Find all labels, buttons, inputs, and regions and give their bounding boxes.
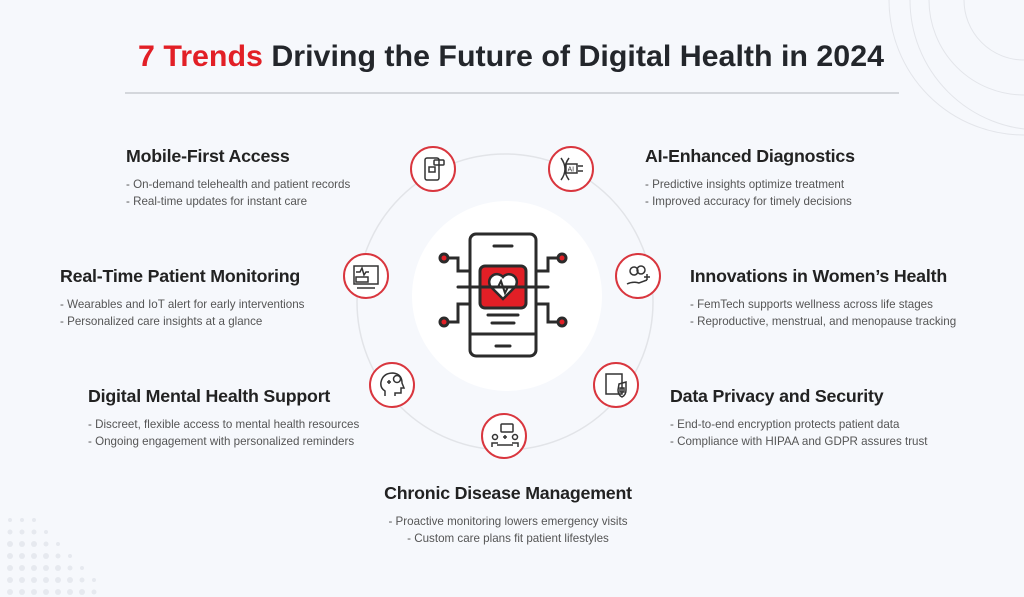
trend: Innovations in Women's Health: - FemTech supports wellness across life stages — [690, 298, 933, 311]
icon: AI DNA: AI — [568, 166, 574, 174]
trend: Chronic Disease Management: - Custom care plans fit patient lifestyles — [407, 532, 609, 545]
trend: AI-Enhanced Diagnostics: - Improved accuracy for timely decisions — [645, 195, 852, 208]
trend: Digital Mental Health Support — [88, 386, 359, 448]
trend: Mobile-First Access: - On-demand telehealth and patient records — [126, 178, 350, 191]
trend: Data Privacy and Security: - End-to-end encryption protects patient data — [670, 418, 899, 431]
trend: Chronic Disease Management: Chronic Disease Management — [384, 483, 632, 503]
trend: Data Privacy and Security: - Compliance with HIPAA and GDPR assures trust — [670, 435, 928, 448]
trend: Real-Time Patient Monitoring — [60, 266, 304, 328]
trend: Real-Time Patient Monitoring: - Wearables and IoT alert for early interventions — [60, 298, 304, 311]
trend: AI-Enhanced Diagnostics: AI-Enhanced Diagnostics — [645, 146, 855, 166]
icon: monitor — [343, 253, 389, 299]
trend: Chronic Disease Management — [384, 483, 632, 545]
center illustration: phone with heart — [412, 201, 602, 391]
trend: Data Privacy and Security — [670, 386, 928, 448]
trend: Digital Mental Health Support: - Discreet, flexible access to mental health resources — [88, 418, 359, 431]
icon: data privacy — [593, 362, 639, 408]
trend: Innovations in Women's Health — [690, 266, 956, 328]
trend: Real-Time Patient Monitoring: Real-Time Patient Monitoring — [60, 266, 300, 286]
trend: AI-Enhanced Diagnostics: - Predictive insights optimize treatment — [645, 178, 844, 191]
trend: Chronic Disease Management: - Proactive monitoring lowers emergency visits — [388, 515, 628, 528]
icon: women's health — [615, 253, 661, 299]
trend: Mobile-First Access — [126, 146, 350, 208]
trend: Mobile-First Access: Mobile-First Access — [126, 146, 290, 166]
trend: Digital Mental Health Support: Digital Mental Health Support — [88, 386, 330, 406]
trend: AI-Enhanced Diagnostics — [645, 146, 855, 208]
trend: Digital Mental Health Support: - Ongoing engagement with personalized reminders — [88, 435, 354, 448]
trend: Innovations in Women's Health: - Reproductive, menstrual, and menopause tracking — [690, 315, 956, 328]
icon: mobile lock — [410, 146, 456, 192]
trend: Innovations in Women's Health: Innovations in Women’s Health — [690, 266, 947, 286]
icon: AI DNA — [548, 146, 594, 192]
icon: mental health head — [369, 362, 415, 408]
trend: Mobile-First Access: - Real-time updates for instant care — [126, 195, 307, 208]
trend: Real-Time Patient Monitoring: - Personalized care insights at a glance — [60, 315, 262, 328]
title: 7 Trends Driving the Future of Digital Health in 2024 — [138, 40, 884, 73]
trend: Data Privacy and Security: Data Privacy and Security — [670, 386, 883, 406]
icon: chronic care — [481, 413, 527, 459]
